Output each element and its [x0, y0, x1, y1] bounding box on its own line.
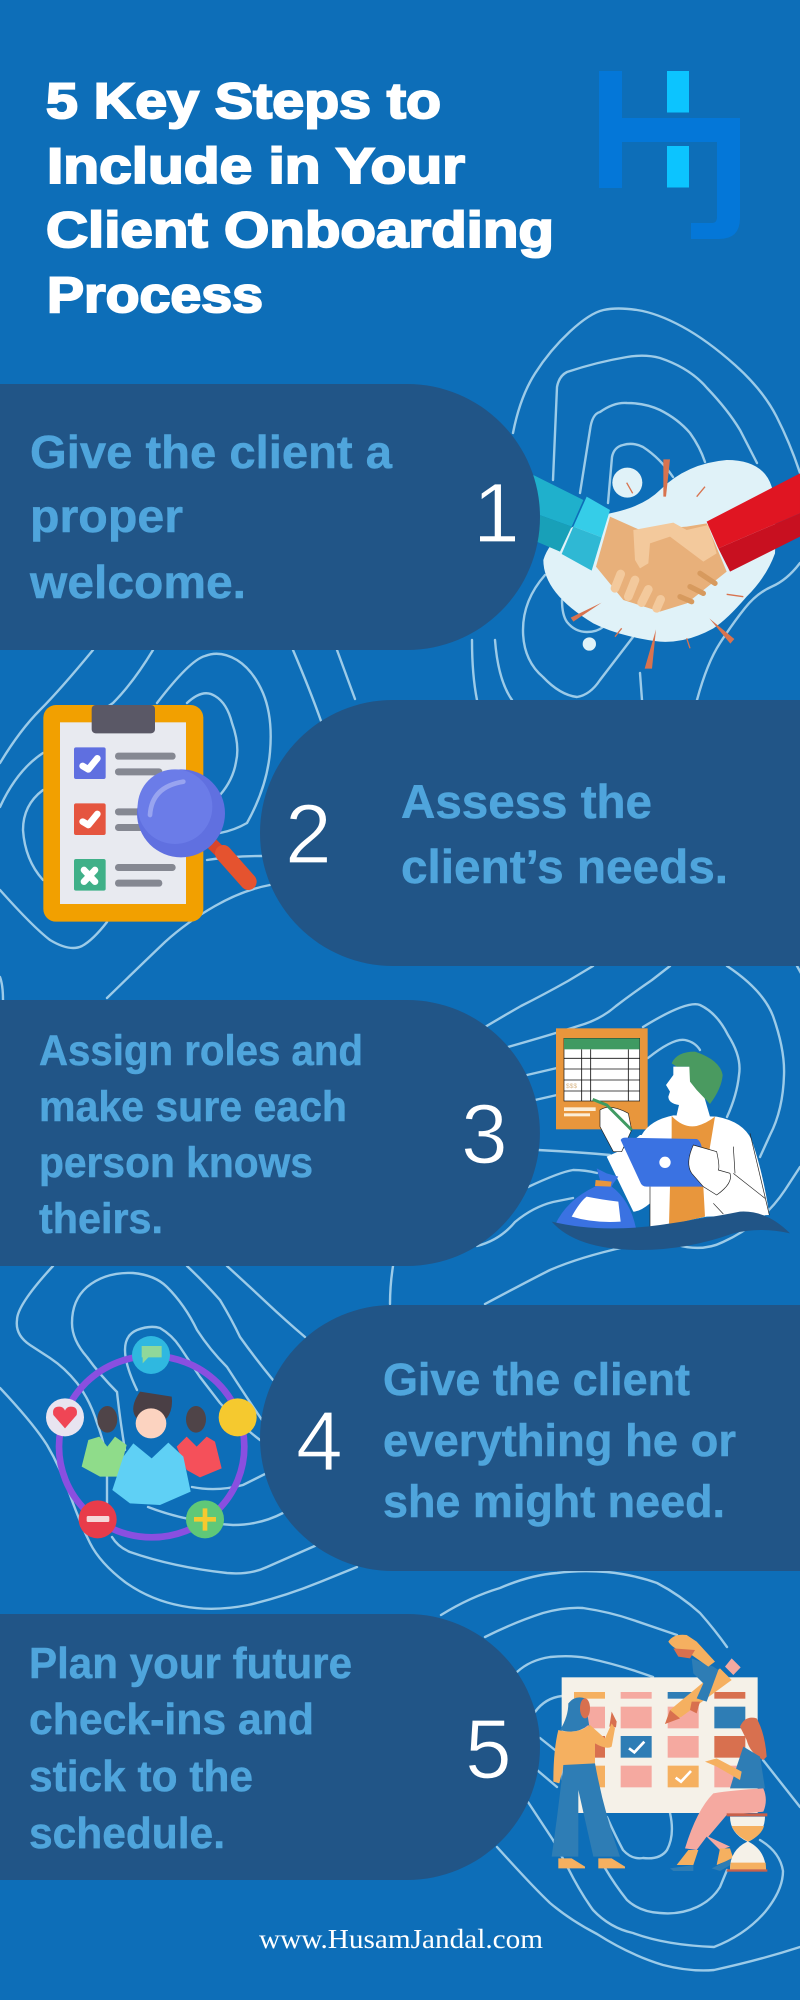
icon: HJ logo [599, 71, 740, 239]
panel: step 2: 2 [285, 787, 332, 881]
panel: step 3: person knows [39, 1139, 313, 1187]
panel: step 1 [0, 384, 540, 650]
panel: step 4: everything he or [383, 1415, 736, 1466]
panel: step 2: client’s needs. [401, 840, 728, 893]
panel: step 5: check-ins and [29, 1695, 314, 1744]
icon: person with tablet and spreadsheet [552, 1028, 790, 1250]
panel: step 5: 5 [465, 1702, 512, 1796]
panel: step 5: schedule. [29, 1809, 225, 1858]
panel: step 5 [0, 1614, 540, 1880]
panel: step 5: Plan your future [29, 1639, 352, 1688]
panel: step 3 [0, 1000, 540, 1266]
title: Process [47, 267, 263, 323]
panel: step 1: 1 [473, 466, 520, 560]
footer website: www.HusamJandal.com [259, 1924, 543, 1954]
panel: step 4: she might need. [383, 1476, 725, 1527]
panel: step 1: proper [30, 490, 183, 542]
panel: step 2 [260, 700, 800, 966]
panel: step 1: Give the client a [30, 426, 392, 478]
panel: step 3: 3 [461, 1087, 508, 1181]
panel: step 5: stick to the [29, 1752, 253, 1801]
title: Include in Your [47, 138, 465, 194]
icon: calendar planning [552, 1635, 767, 1872]
icon: handshake [533, 459, 800, 669]
panel: step 3: theirs. [39, 1195, 163, 1243]
panel: step 3: make sure each [39, 1083, 347, 1131]
title: Client Onboarding [46, 202, 554, 258]
panel: step 3: Assign roles and [39, 1027, 363, 1075]
icon: person with tablet and spreadsheet: $$$ [566, 1083, 577, 1090]
panel: step 2: Assess the [401, 775, 652, 828]
title [46, 73, 554, 323]
panel: step 4 [260, 1305, 800, 1571]
title: 5 Key Steps to [46, 73, 441, 129]
icon: team circle [46, 1336, 257, 1538]
panel: step 4: 4 [296, 1394, 343, 1488]
panel: step 4: Give the client [383, 1354, 690, 1405]
icon: clipboard with magnifier [43, 705, 248, 922]
panel: step 1: welcome. [29, 556, 246, 608]
